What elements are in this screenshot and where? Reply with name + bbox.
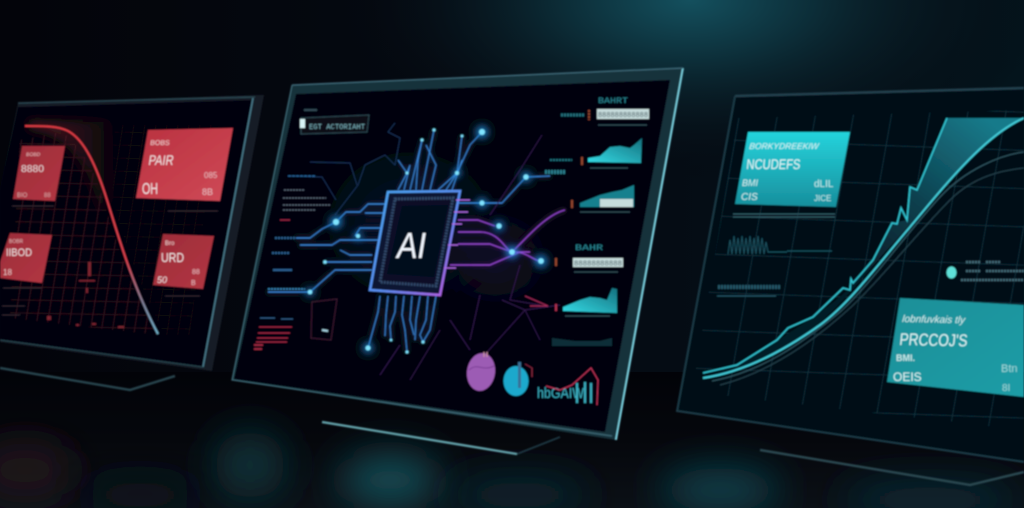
- monitor stand: centre: [322, 422, 560, 454]
- teal card top: BORKYDREEKIW: [749, 141, 820, 151]
- area chart 1: [545, 138, 642, 172]
- red card top left: [13, 146, 65, 201]
- mini bars: [552, 338, 612, 346]
- red card bottom left: 18: [3, 268, 12, 277]
- spike line: [703, 118, 947, 373]
- red card top left: BOBD: [26, 152, 41, 158]
- screen: centre: [234, 80, 670, 432]
- teal card top: dLIL: [814, 179, 834, 190]
- grid: left chart: [10, 125, 215, 335]
- centre glow behind chip: [350, 175, 470, 275]
- teal card top: CIS: [741, 192, 758, 203]
- blue and purple circuit traces: [268, 130, 565, 352]
- teal card bottom: Btn: [1001, 363, 1018, 375]
- middle table: 88888888888: [574, 260, 622, 268]
- faint captions: [2, 206, 218, 315]
- screen: left: [0, 100, 252, 367]
- panel: right monitor, teal uptrend: [677, 88, 1024, 485]
- scatter marks: [47, 262, 124, 328]
- AI chip: [370, 191, 470, 295]
- teal card top: JICE: [814, 194, 831, 203]
- teal card bottom: PRCCOJ'S: [899, 330, 968, 350]
- red card bottom right: 50: [157, 275, 167, 285]
- teal card bottom: 8I: [1002, 383, 1010, 394]
- red card bottom left: [0, 233, 52, 283]
- teal card top: BMI: [742, 178, 758, 188]
- red card bottom right: 88: [192, 269, 200, 276]
- teal card bottom: [887, 298, 1024, 397]
- teal card bottom: BMI.: [896, 353, 915, 363]
- growth curve: [703, 118, 1024, 378]
- cyan gauge: [504, 362, 532, 396]
- red card bottom right: [153, 234, 214, 289]
- monitor stand: left: [0, 368, 175, 390]
- area chart 2: [572, 185, 634, 212]
- circuit glow: [268, 130, 565, 352]
- red text lines: [254, 318, 293, 349]
- red card top left: 8880: [21, 164, 44, 175]
- red card bottom left: BOBR: [9, 239, 24, 245]
- faint red schematic: [311, 299, 337, 340]
- red card top right: PAIR: [148, 152, 175, 168]
- heading pill: EGT ACTORIAHT: [309, 124, 365, 132]
- panel: centre monitor, AI chip: [232, 68, 683, 454]
- top-right table: 888888888888: [598, 112, 648, 120]
- waveform: [728, 236, 832, 254]
- mini chart label: hbGAIW: [537, 385, 585, 402]
- red card bottom left: IIBOD: [6, 247, 32, 259]
- red card top left: 88: [44, 193, 51, 199]
- faint left circuit: [290, 123, 400, 215]
- red card top right: BOBS: [150, 140, 170, 147]
- grid: right chart: [692, 110, 1024, 430]
- red card top right: 8B: [202, 187, 213, 197]
- teal area under spike: [703, 118, 1024, 378]
- chip label: AI: [395, 225, 426, 266]
- red card top right: [136, 128, 233, 201]
- red card bottom right: URD: [161, 250, 184, 265]
- faint purple network: [380, 135, 560, 380]
- panel: left monitor, red downtrend: [0, 95, 264, 390]
- red curve: [25, 126, 158, 334]
- red card top right: OH: [142, 181, 158, 198]
- purple gauge: [464, 351, 498, 393]
- middle table: BAHR: [575, 244, 603, 253]
- teal card bottom: OEIS: [893, 370, 922, 384]
- middle table: [556, 244, 623, 272]
- caption bars: [717, 287, 781, 296]
- teal card top: NCUDEFS: [746, 156, 801, 172]
- monitor frame: left: [0, 95, 264, 371]
- monitor stand: right: [760, 450, 1024, 485]
- heading pill: [300, 109, 369, 134]
- top-right table: [561, 97, 649, 125]
- caption under teal card: [733, 214, 835, 217]
- chart glow: left: [30, 122, 112, 210]
- monitor frame: centre: [232, 68, 683, 440]
- teal card bottom: lobnfuvkais tly: [902, 314, 967, 326]
- left text lines: [268, 176, 330, 289]
- red card bottom right: Bro: [165, 241, 175, 247]
- reflective floor: [0, 372, 1024, 508]
- teal card top: [735, 132, 850, 207]
- red card top right: 085: [204, 171, 218, 180]
- teal dot and labels: [946, 262, 1024, 280]
- glowing nodes: [306, 126, 547, 354]
- top-right table: BAHRT: [598, 97, 628, 106]
- red card top left: BIO: [17, 193, 28, 199]
- mini chart label: [537, 368, 598, 405]
- red card bottom right: B: [191, 280, 196, 287]
- area chart 3: [525, 288, 617, 316]
- screen: right: [677, 88, 1024, 462]
